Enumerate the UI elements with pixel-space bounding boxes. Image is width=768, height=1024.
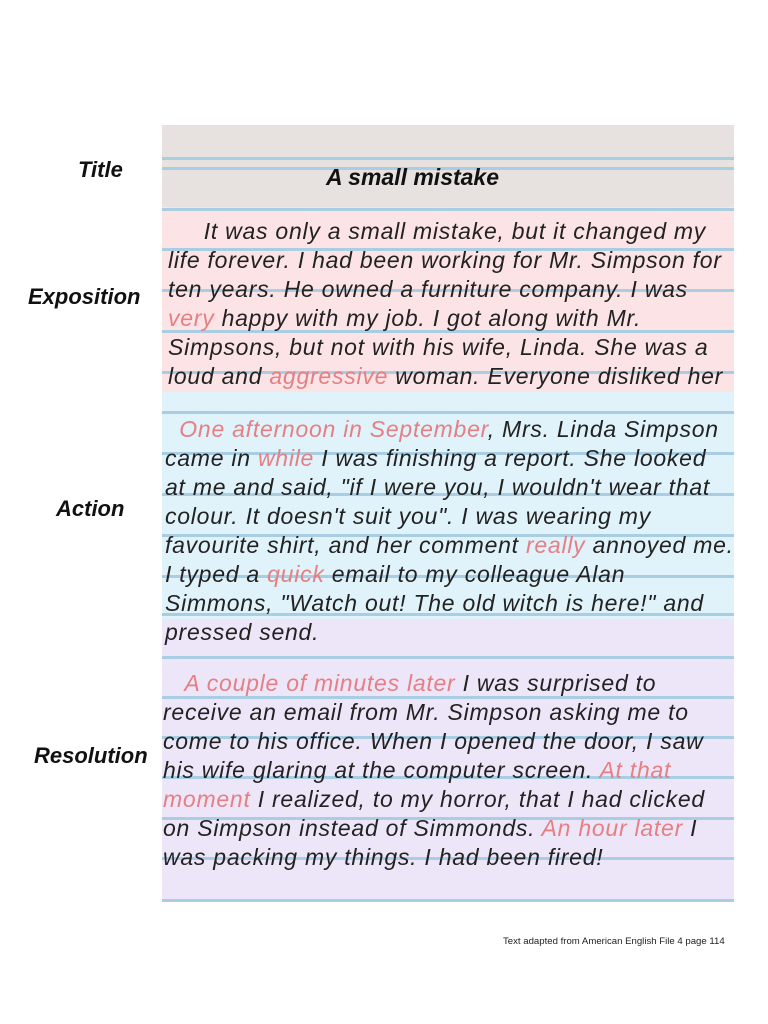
text block: resolution bbox=[163, 670, 705, 870]
text block: action: favourite shirt, and her comment really annoyed me. bbox=[165, 532, 734, 558]
text block: exposition: ten years. He owned a furniture company. I was bbox=[168, 276, 688, 302]
band: action background bbox=[162, 392, 734, 619]
text block: action: came in while I was finishing a report. She looked bbox=[165, 445, 706, 471]
text block: action: at me and said, "if I were you, I wouldn't wear that bbox=[165, 474, 710, 500]
text block: exposition: very happy with my job. I got along with Mr. bbox=[168, 305, 641, 331]
text block: resolution: A couple of minutes later I was surprised to bbox=[184, 670, 656, 696]
text block: exposition bbox=[168, 218, 723, 389]
label: Resolution: Resolution bbox=[34, 743, 148, 768]
text block: exposition: Simpsons, but not with his wife, Linda. She was a bbox=[168, 334, 708, 360]
label: Exposition: Exposition bbox=[28, 284, 140, 309]
text block: exposition: loud and aggressive woman. Everyone disliked her bbox=[168, 363, 723, 389]
text block: resolution: receive an email from Mr. Simpson asking me to bbox=[163, 699, 689, 725]
text block: resolution: on Simpson instead of Simmonds. An hour later I bbox=[163, 815, 697, 841]
text block: resolution: moment I realized, to my horror, that I had clicked bbox=[163, 786, 705, 812]
text block: action bbox=[164, 416, 734, 645]
text block: action: One afternoon in September, Mrs. Linda Simpson bbox=[179, 416, 719, 442]
label: Action: Action bbox=[56, 496, 124, 521]
footer: source credit: Text adapted from American English File 4 page 114 bbox=[503, 936, 725, 947]
text block: exposition: life forever. I had been working for Mr. Simpson for bbox=[168, 247, 722, 273]
text block: action: pressed send. bbox=[165, 619, 319, 645]
text block: exposition: It was only a small mistake, but it changed my bbox=[204, 218, 706, 244]
text block: action: I typed a quick email to my colleague Alan bbox=[165, 561, 625, 587]
band: resolution background bbox=[162, 619, 734, 902]
band: title background bbox=[162, 125, 734, 207]
label: Title: Title bbox=[78, 157, 123, 182]
text block: action: Simmons, "Watch out! The old witch is here!" and bbox=[165, 590, 704, 616]
heading: story title: A small mistake bbox=[326, 164, 499, 190]
text block: resolution: come to his office. When I opened the door, I saw bbox=[163, 728, 703, 754]
text block: action: colour. It doesn't suit you". I was wearing my bbox=[165, 503, 651, 529]
text block: resolution: was packing my things. I had been fired! bbox=[163, 844, 603, 870]
text block: resolution: his wife glaring at the computer screen. At that bbox=[163, 757, 671, 783]
band: exposition background bbox=[162, 207, 734, 392]
